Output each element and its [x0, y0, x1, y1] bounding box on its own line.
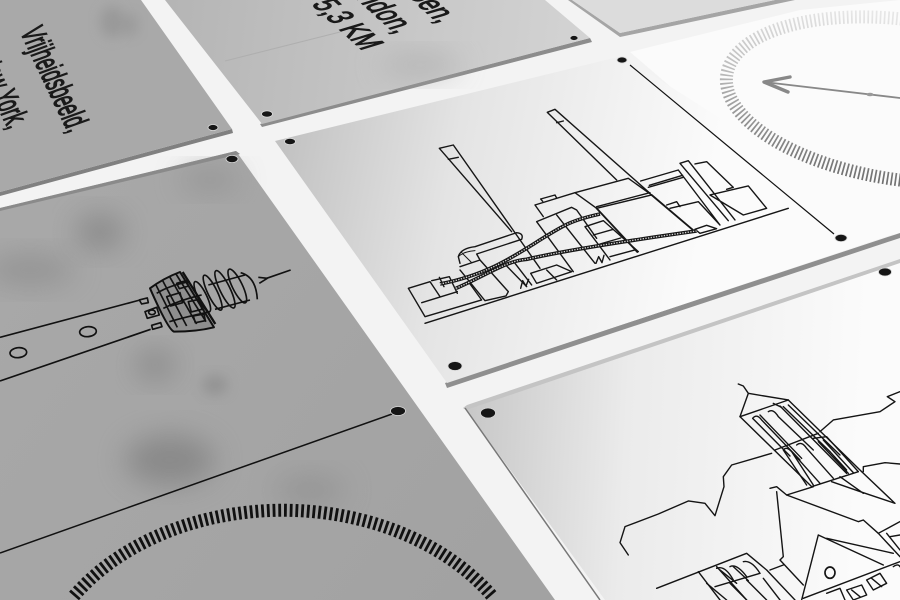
hole: top-centre plate corner	[262, 111, 272, 117]
panel: lower-left lighthouse plate	[0, 151, 555, 600]
hole: church plate top	[878, 268, 892, 276]
illustration: church tower and skyline	[620, 384, 900, 600]
compass dial: tick ring	[716, 0, 900, 204]
hole: church plate left	[480, 408, 496, 418]
illustration: lighthouse	[0, 267, 291, 381]
panel: compass plate background	[630, 0, 900, 235]
mounting holes	[208, 36, 892, 418]
illustration: conveyor belts	[440, 214, 697, 288]
illustration: power plant	[408, 109, 788, 323]
panel: top-left plate	[0, 0, 233, 196]
dial: black tick ring	[74, 510, 492, 596]
panel: top-right strip plate	[568, 0, 795, 37]
hole: factory plate right	[835, 234, 847, 242]
divider line	[630, 65, 834, 234]
hole: lighthouse plate top	[226, 155, 238, 163]
panel: lower-right church plate	[463, 259, 900, 600]
panel: centre factory plate	[275, 56, 900, 388]
hole: factory plate left	[284, 138, 296, 145]
hole: factory plate bottom	[448, 362, 462, 370]
panel: top-centre plate	[165, 0, 592, 127]
divider line	[0, 414, 392, 553]
text: Vrijheidsbeeld: Vrijheidsbeeld,	[13, 22, 97, 137]
compass needle	[764, 77, 900, 98]
hole: lighthouse plate right	[390, 406, 406, 416]
hole: factory plate top	[617, 57, 627, 63]
hole: top-centre plate right	[570, 36, 578, 40]
hole: top-left plate	[208, 124, 218, 130]
